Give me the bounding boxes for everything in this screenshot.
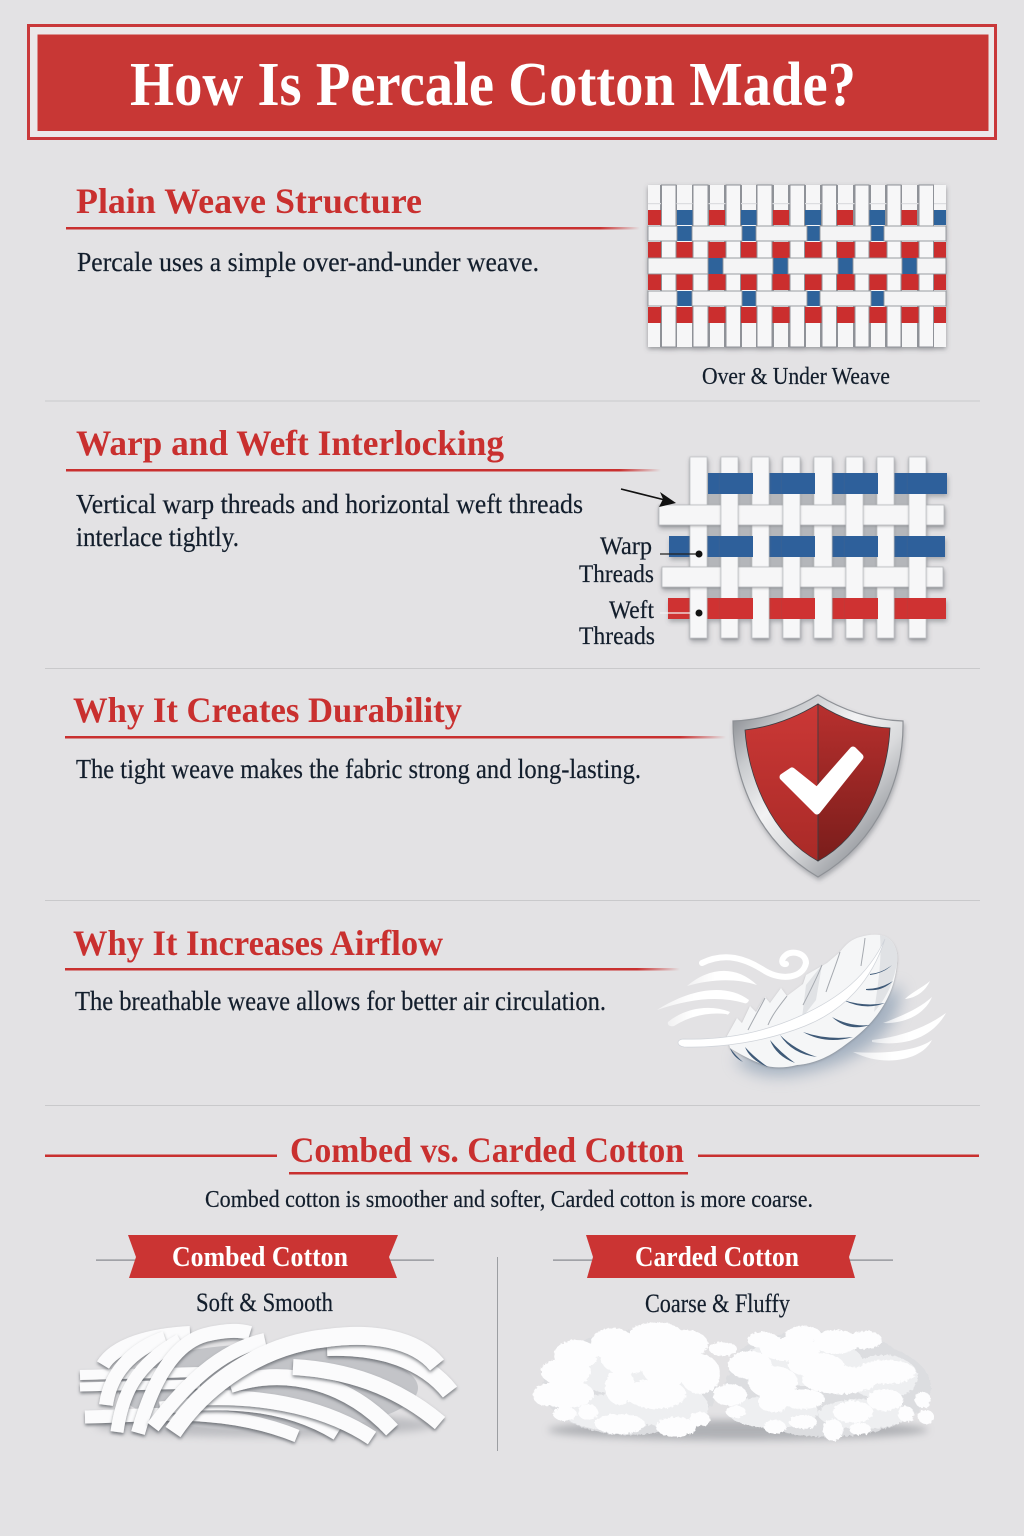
heading: warp and weft: Warp and Weft Interlocking [76,423,504,463]
ribbon: carded cotton: Carded Cotton [635,1242,799,1273]
panel: combed cotton [80,1235,450,1438]
illustration: carded cotton tufts [533,1322,934,1441]
illustration: combed cotton strands [80,1331,450,1438]
diagram: warp and weft weave [659,457,947,638]
label: warp threads: Threads [579,561,654,588]
label: weft threads: Weft [609,597,654,624]
ribbon: carded cotton [586,1235,856,1278]
text: airflow description: The breathable weave allows for better air circulation. [75,986,606,1016]
text: comparison summary: Combed cotton is smoother and softer, Carded cotton is more coarse. [205,1187,813,1213]
section: plain weave structure [66,181,946,390]
label: warp threads: Warp [600,533,652,560]
section: combed vs carded cotton [45,1130,979,1451]
caption: soft and smooth: Soft & Smooth [196,1288,333,1317]
label: warp threads [579,533,702,588]
arrow: pointer to weave [621,489,676,507]
caption: over and under weave: Over & Under Weave [702,364,890,390]
panel: carded cotton [533,1235,934,1441]
section: airflow [65,923,946,1076]
text: warp and weft description: interlace tightly. [76,522,239,552]
heading: plain weave structure: Plain Weave Structure [76,181,422,221]
heading: why it increases airflow: Why It Increases Airflow [73,923,443,963]
label: weft threads [579,597,702,650]
icon: shield with check mark [733,695,903,877]
icon: feather with air currents [657,935,946,1076]
ribbon: combed cotton [128,1235,398,1278]
ribbon: combed cotton: Combed Cotton [172,1242,348,1273]
heading: why it creates durability: Why It Creates Durability [73,690,462,730]
title: How Is Percale Cotton Made? [130,51,856,119]
title banner [28,26,996,138]
section: durability [65,690,903,877]
text: plain weave description: Percale uses a simple over-and-under weave. [77,247,539,277]
text: durability description: The tight weave makes the fabric strong and long-lasting. [76,754,641,784]
section: warp and weft interlocking [66,423,947,650]
caption: coarse and fluffy: Coarse & Fluffy [645,1289,790,1318]
label: weft threads: Threads [579,623,655,650]
text: warp and weft description [76,489,583,552]
text: warp and weft description: Vertical warp threads and horizontal weft threads [76,489,583,519]
heading: combed vs carded cotton: Combed vs. Carded Cotton [290,1130,684,1170]
diagram: over and under weave [648,185,946,347]
